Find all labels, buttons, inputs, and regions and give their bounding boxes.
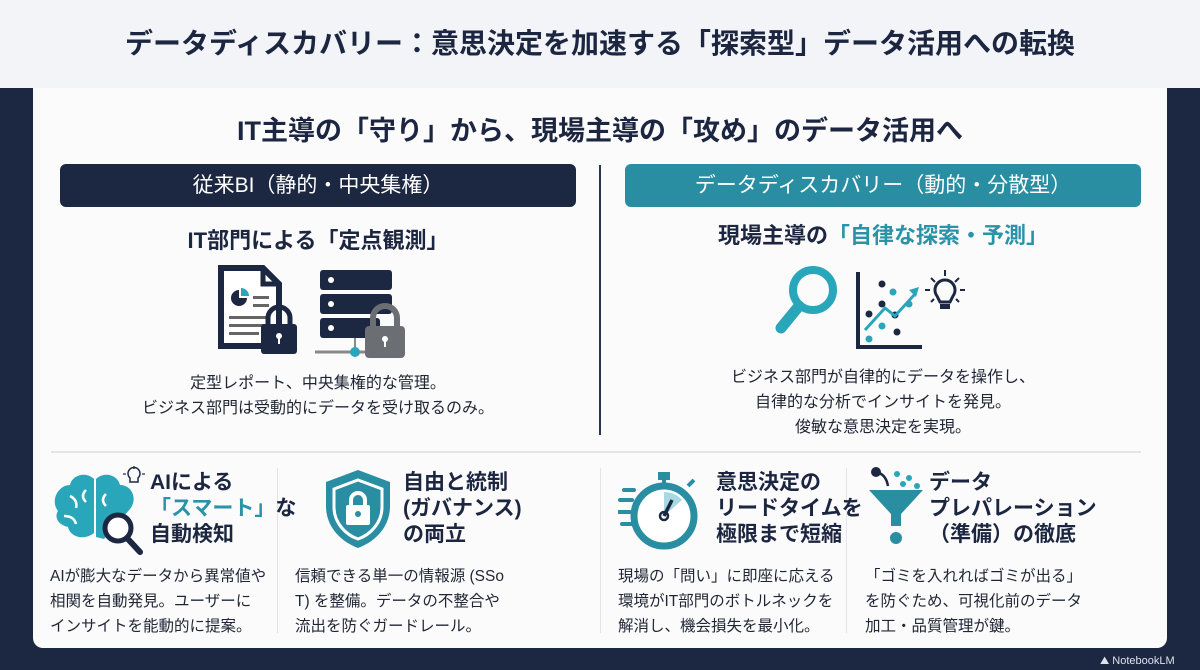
- title: プレパレーション: [929, 497, 1097, 520]
- description: 流出を防ぐガードレール。: [295, 618, 481, 635]
- panel: traditional BI: [60, 164, 576, 417]
- description left: ビジネス部門は受動的にデータを受け取るのみ。: [142, 400, 494, 417]
- description: AIが膨大なデータから異常値や: [50, 568, 266, 585]
- icon: funnel: [869, 467, 923, 544]
- title: リードタイムを: [716, 497, 863, 520]
- description: 相関を自動発見。ユーザーに: [50, 593, 251, 610]
- title: 意思決定の: [716, 471, 821, 494]
- icons: document and server with locks: [218, 265, 405, 358]
- description: [865, 568, 1082, 635]
- description: 加工・品質管理が鍵。: [865, 618, 1020, 635]
- description right: ビジネス部門が自律的にデータを操作し、: [731, 369, 1035, 386]
- description: インサイトを能動的に提案。: [50, 618, 252, 635]
- pill heading left: [60, 164, 576, 207]
- panel: data discovery: [625, 164, 1141, 436]
- header band: [0, 0, 1200, 88]
- title: （準備）の徹底: [929, 523, 1076, 546]
- description: [618, 568, 835, 635]
- description: [50, 568, 266, 635]
- title: 自動検知: [150, 523, 234, 546]
- subheading left: IT部門による「定点観測」: [188, 228, 448, 253]
- feature: lead time: [618, 470, 863, 635]
- icons: magnifier, chart, bulb: [776, 266, 965, 349]
- description right: 俊敏な意思決定を実現。: [795, 419, 971, 436]
- pill heading left: 従来BI（静的・中央集権）: [193, 174, 443, 197]
- feature: governance: [295, 470, 522, 635]
- title: [929, 470, 1097, 546]
- title: データ: [929, 471, 992, 494]
- title: [716, 470, 863, 546]
- icon: brain with magnifier: [54, 466, 145, 555]
- description: [295, 568, 504, 635]
- description right: 自律的な分析でインサイトを発見。: [755, 394, 1011, 411]
- title: [403, 470, 522, 546]
- description left: [142, 374, 494, 417]
- description right: [731, 368, 1035, 436]
- main card: [33, 88, 1167, 648]
- description: 信頼できる単一の情報源 (SSo: [295, 568, 504, 585]
- icon: stopwatch: [618, 472, 698, 550]
- title: [150, 471, 296, 546]
- title: 「スマート」な: [150, 497, 296, 520]
- subheading right: 現場主導の「自律な探索・予測」: [718, 223, 1048, 248]
- title: AIによる: [150, 471, 233, 494]
- feature: AI smart detection: [50, 466, 296, 635]
- title: の両立: [403, 523, 466, 546]
- pill heading right: [625, 164, 1141, 207]
- description: 現場の「問い」に即座に応える: [618, 568, 835, 585]
- subtitle: IT主導の「守り」から、現場主導の「攻め」のデータ活用へ: [237, 116, 963, 146]
- description: を防ぐため、可視化前のデータ: [865, 593, 1082, 610]
- title: 極限まで短縮: [716, 523, 842, 546]
- feature: data preparation: [865, 467, 1097, 635]
- description: 「ゴミを入れればゴミが出る」: [865, 568, 1082, 585]
- logo: NotebookLM: ⛰ NotebookLM: [1100, 655, 1175, 667]
- description: T) を整備。データの不整合や: [295, 593, 500, 610]
- description left: 定型レポート、中央集権的な管理。: [190, 375, 446, 392]
- title: 自由と統制: [403, 471, 508, 494]
- description: 環境がIT部門のボトルネックを: [618, 593, 833, 610]
- icon: shield with lock: [326, 470, 390, 548]
- title: データディスカバリー：意思決定を加速する「探索型」データ活用への転換: [125, 28, 1075, 59]
- description: 解消し、機会損失を最小化。: [618, 618, 820, 635]
- pill heading right: データディスカバリー（動的・分散型）: [695, 174, 1071, 197]
- title: (ガバナンス): [403, 497, 522, 520]
